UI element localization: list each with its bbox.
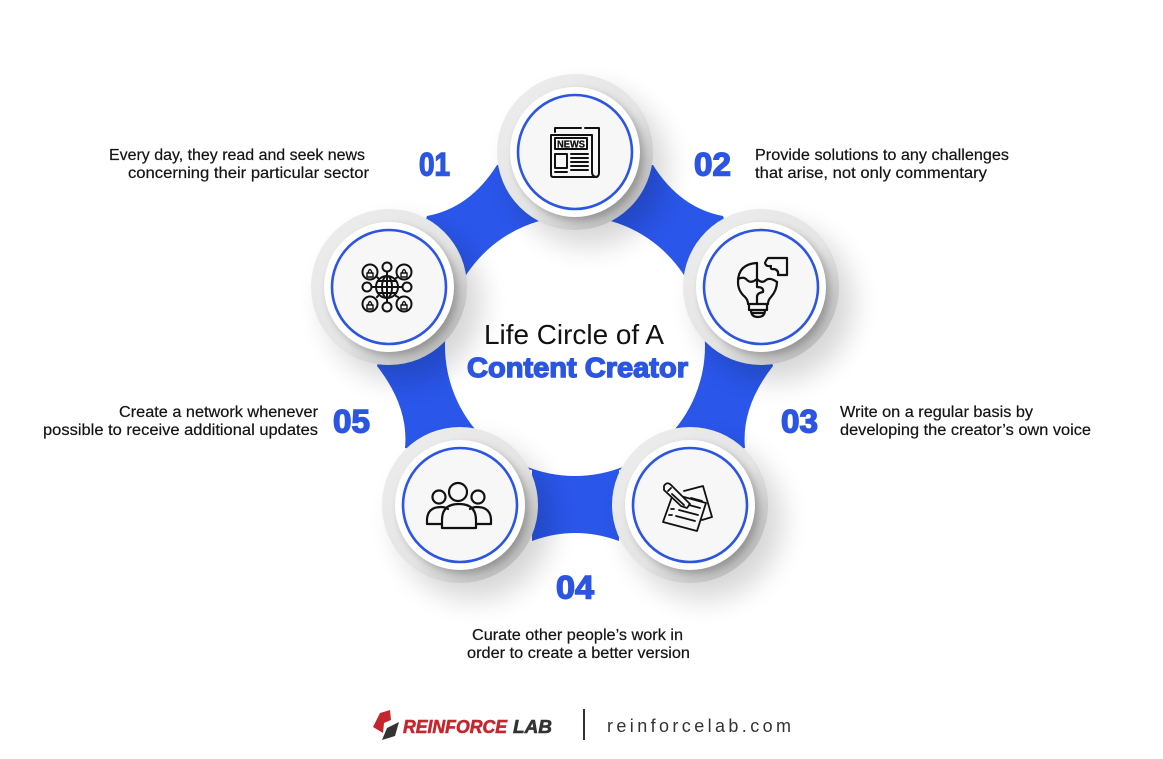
step 04 text: Curate other people’s work in [472, 627, 683, 644]
step 01 text: concerning their particular sector [128, 165, 369, 182]
node 3: notes [612, 427, 782, 599]
blue ring connecting the five nodes [377, 165, 773, 541]
icon: puzzle light bulb [738, 258, 787, 317]
step 03 text: Write on a regular basis by [840, 404, 1033, 421]
website: reinforcelab.com [607, 716, 791, 736]
step 05 text: Create a network whenever [119, 404, 318, 421]
step 04 text: 04 [556, 570, 594, 606]
node 4: team [382, 427, 552, 599]
title: Life Circle of A [484, 319, 664, 350]
step 04 text [467, 570, 690, 662]
icon: three people [427, 483, 491, 528]
step 02 text: 02 [694, 146, 731, 182]
step 01 text: 01 [419, 146, 450, 182]
icon: globe network [362, 262, 412, 312]
icon: newspaper [551, 128, 599, 177]
step 02 text: that arise, not only commentary [755, 165, 987, 182]
step 05 text [43, 404, 370, 440]
step 05 text: possible to receive additional updates [43, 422, 318, 439]
icon: note and pencil [663, 483, 712, 531]
brand name: REINFORCE [403, 717, 508, 737]
node 2: puzzle bulb [683, 209, 853, 381]
title: Content Creator [467, 352, 688, 383]
node 1: newspaper [497, 74, 667, 246]
step 04 text: order to create a better version [467, 645, 690, 662]
icon label: NEWS: NEWS [557, 138, 585, 150]
footer logo and url [373, 709, 791, 740]
step 03 text: 03 [781, 404, 818, 440]
node 5: network [311, 209, 481, 381]
step 02 text: Provide solutions to any challenges [755, 147, 1009, 164]
step 05 text: 05 [333, 404, 370, 440]
title [467, 319, 688, 383]
step 03 text: developing the creator’s own voice [840, 422, 1091, 439]
step 03 text [781, 404, 1091, 440]
step 01 text: Every day, they read and seek news [109, 147, 365, 164]
step 01 text [109, 146, 450, 182]
icon: logo mark [373, 710, 399, 740]
brand name: LAB [513, 717, 552, 737]
step 02 text [694, 146, 1009, 182]
